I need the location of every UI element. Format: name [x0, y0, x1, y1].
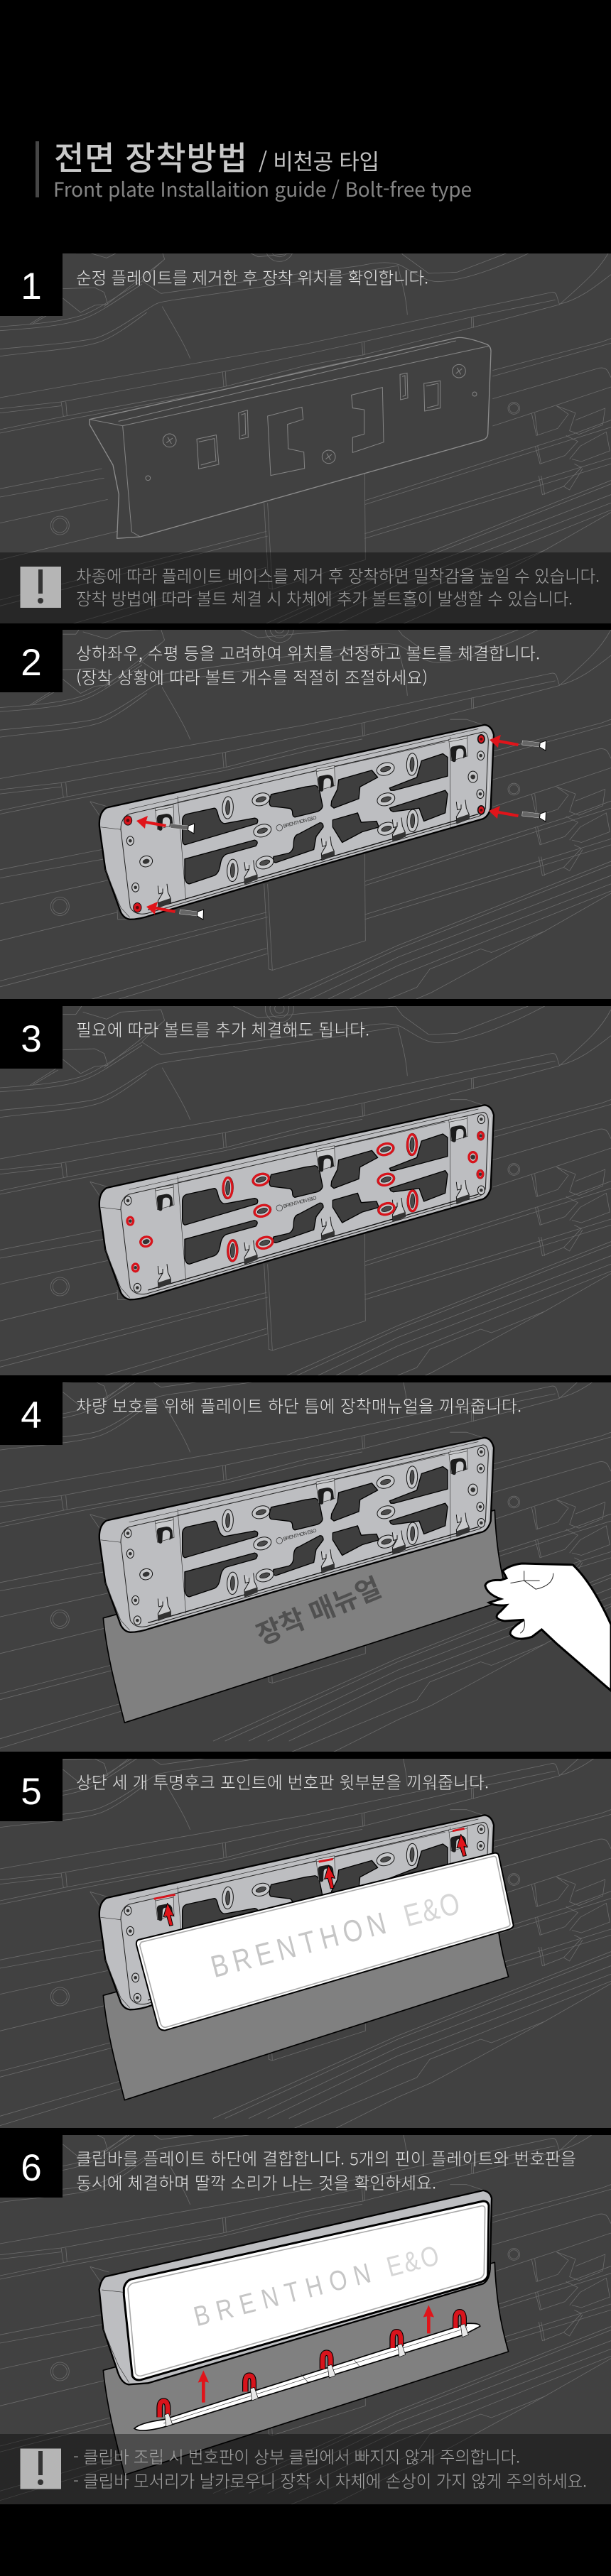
number 6: 6 [21, 2147, 42, 2189]
step 5 text: 상단 세 개 투명후크 포인트에 번호판 윗부분을 끼워줍니다. [76, 1769, 489, 1794]
number 3: 3 [21, 1018, 42, 1060]
license plate [136, 1853, 514, 2030]
step 3 text: 필요에 따라 볼트를 추가 체결해도 됩니다. [76, 1017, 369, 1041]
panel 5 background [0, 1759, 611, 2128]
panel 3 background [0, 1006, 611, 1375]
panel 1: check position [0, 253, 611, 623]
manual sheet label: 장착 매뉴얼 [249, 1566, 386, 1652]
screw [521, 738, 547, 751]
assembled frame [99, 2190, 492, 2384]
step 4 text: 차량 보호를 위해 플레이트 하단 틈에 장착매뉴얼을 끼워줍니다. [76, 1393, 521, 1417]
caution band 1 [0, 552, 611, 623]
number 5: 5 [21, 1771, 42, 1813]
caution icon [20, 567, 61, 608]
number 5 [0, 1752, 63, 1821]
red corner holes [124, 735, 485, 912]
base plate [90, 337, 491, 538]
panel 6: clip bar [0, 2135, 611, 2504]
red hook bars [154, 1828, 465, 1899]
red arrows [136, 735, 519, 915]
caution text [73, 2444, 587, 2492]
number 4: 4 [21, 1395, 42, 1436]
license plate: BRENTHON [207, 1906, 389, 1985]
caution text: - 클립바 조립 시 번호판이 상부 클립에서 빠지지 않게 주의합니다. [73, 2444, 520, 2468]
caution text [76, 563, 600, 610]
panel 5 linework, sheet, plate and license plate [0, 1759, 611, 2128]
caution text: - 클립바 모서리가 날카로우니 장착 시 차체에 손상이 가지 않게 주의하세요. [73, 2468, 587, 2492]
step 1 text: 순정 플레이트를 제거한 후 장착 위치를 확인합니다. [76, 265, 428, 289]
step 6 text: 동시에 체결하며 딸깍 소리가 나는 것을 확인하세요. [76, 2170, 436, 2194]
panel 1 linework and base plate [0, 253, 611, 623]
number 6 [0, 2129, 63, 2198]
assembled frame: BRENTHON [190, 2256, 374, 2332]
icon: hand [485, 1563, 611, 1691]
main title: 전면 장착방법 [54, 133, 247, 180]
caution text: 장착 방법에 따라 볼트 체결 시 차체에 추가 볼트홀이 발생할 수 있습니다. [76, 586, 573, 610]
panel 2: fasten bolts [0, 630, 611, 999]
screws and arrows [136, 735, 547, 919]
red arrows [163, 1834, 467, 1926]
number 3 [0, 1000, 63, 1069]
red arrows [198, 2305, 434, 2403]
number 2 [0, 623, 63, 692]
panel 1 background [0, 253, 611, 623]
assembled frame: E&O [383, 2239, 442, 2283]
panel 3: additional bolts [0, 1006, 611, 1375]
title block [36, 133, 472, 203]
caution band 2 [0, 2434, 611, 2504]
number 2: 2 [21, 642, 42, 684]
panel 5: hook the license plate [0, 1759, 611, 2128]
screw [521, 809, 547, 822]
pins [160, 2312, 464, 2417]
panel 2 linework and plate [0, 630, 611, 999]
panel 6 background [0, 2135, 611, 2504]
caution icon [20, 2448, 61, 2489]
clip bar [134, 2312, 480, 2430]
subtitle korean: / 비천공 타입 [259, 144, 379, 176]
panel 6 linework, sheet and assembled plate [0, 2135, 611, 2504]
red slots [127, 1133, 483, 1272]
number 1 [0, 253, 63, 316]
panel 4: manual sheet [0, 1382, 611, 1752]
step 2 text: (장착 상황에 따라 볼트 개수를 적절히 조절하세요) [76, 665, 428, 689]
panel 4 background [0, 1382, 611, 1752]
subtitle english: Front plate Installaition guide / Bolt-free type [53, 175, 472, 203]
panel 4 linework, sheet and plate [0, 1382, 611, 1752]
step 6 text [76, 2146, 576, 2194]
number 4 [0, 1376, 63, 1445]
step 6 text: 클립바를 플레이트 하단에 결합합니다. 5개의 핀이 플레이트와 번호판을 [76, 2146, 576, 2170]
title accent bar [36, 141, 39, 197]
panel 2 background [0, 630, 611, 999]
screw [170, 821, 195, 834]
caution text: 차종에 따라 플레이트 베이스를 제거 후 장착하면 밀착감을 높일 수 있습니다. [76, 563, 600, 587]
screw [179, 907, 205, 919]
step 2 text: 상하좌우, 수평 등을 고려하여 위치를 선정하고 볼트를 체결합니다. [76, 640, 540, 665]
number 1: 1 [21, 266, 42, 307]
license plate: E&O [400, 1887, 463, 1933]
panel 3 linework and plate [0, 1006, 611, 1375]
step 2 text [76, 640, 540, 689]
